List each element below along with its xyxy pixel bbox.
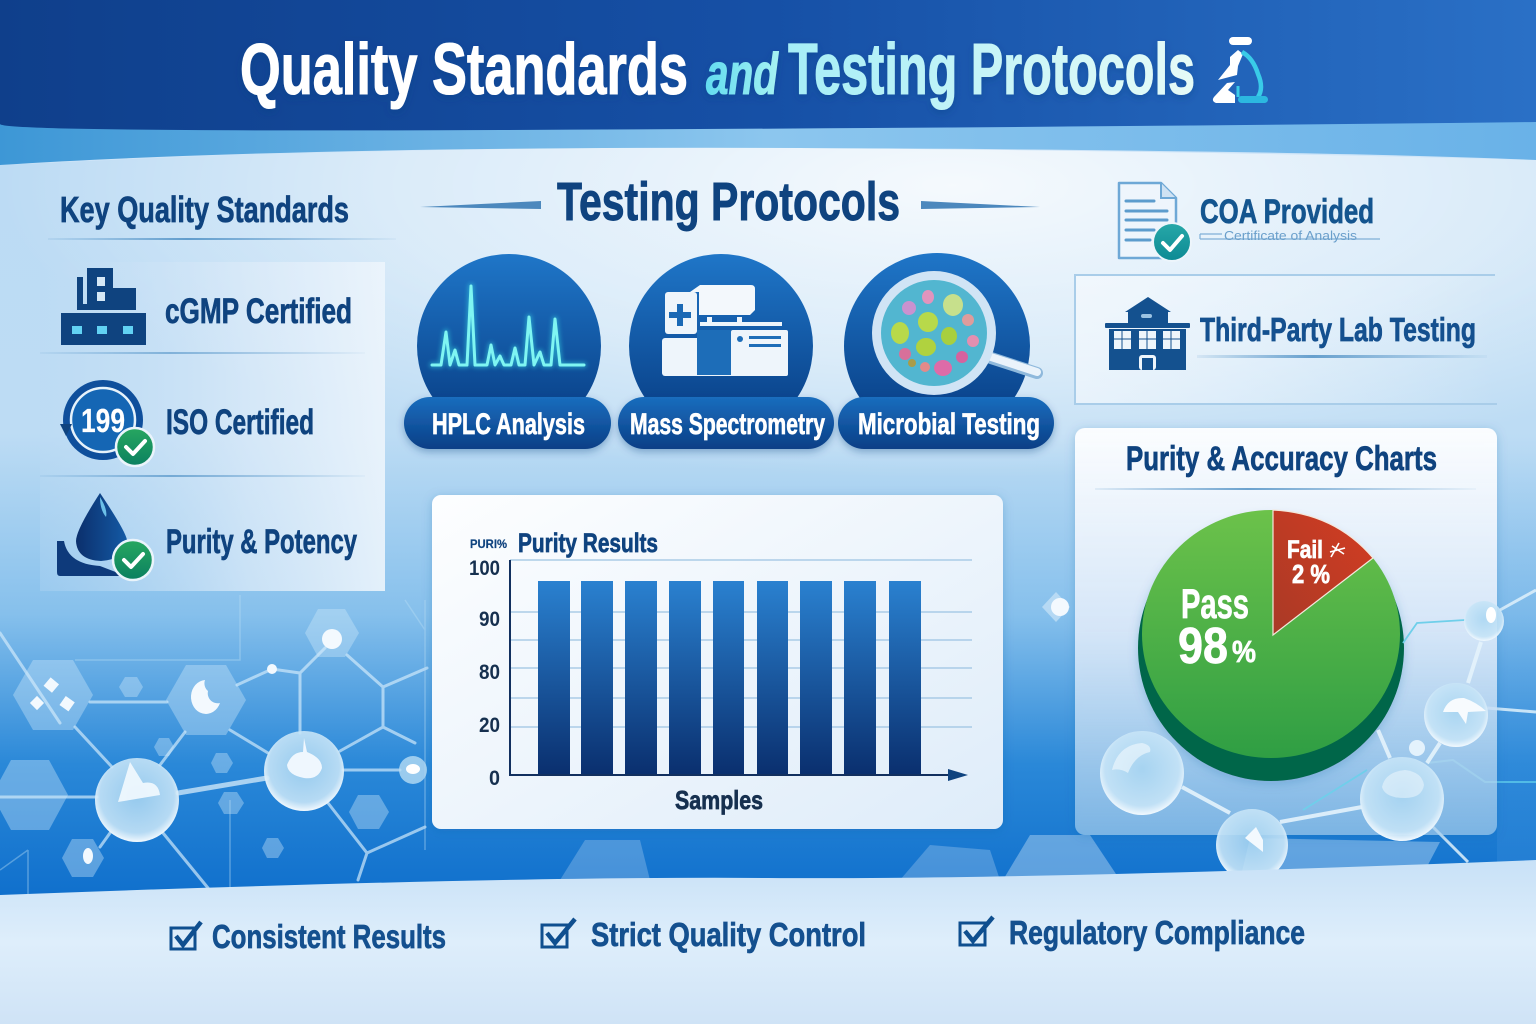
panel: key quality standards [40, 262, 385, 591]
x axis label: Samples [675, 785, 763, 815]
label: purity and potency: Purity & Potency [166, 523, 357, 561]
panel: third-party lab testing [1075, 275, 1497, 404]
icon: chromatogram [417, 254, 601, 438]
pie label: pass: % [1232, 634, 1256, 669]
protocol: mass spectrometry [618, 254, 834, 449]
label pill: Microbial Testing [858, 408, 1040, 441]
footer band [0, 860, 1536, 1024]
chart title [470, 528, 658, 558]
icon: document with check [1119, 183, 1191, 261]
pie label: pass: 98 [1178, 617, 1228, 674]
footer item: strict quality control: Strict Quality Control [591, 916, 866, 953]
icon: factory [61, 268, 146, 345]
y axis labels: 90 [479, 608, 500, 631]
icon: magnifier with microbes [844, 253, 1037, 439]
axes [510, 560, 968, 781]
pie label: fail: Fail [1287, 536, 1323, 564]
protocol: HPLC analysis [404, 254, 611, 449]
label pill: HPLC Analysis [432, 408, 585, 441]
icon: lab building [1105, 297, 1190, 370]
title [240, 30, 1195, 110]
pie label: pass [1178, 580, 1256, 674]
title: Quality Standards [240, 30, 688, 110]
protocol: microbial testing [838, 253, 1054, 449]
panel: purity results bar chart [432, 495, 1003, 829]
bars [538, 581, 921, 775]
footer item: consistent results [171, 918, 446, 955]
chart title: Purity Results [518, 528, 658, 558]
section heading: testing protocols: Testing Protocols [557, 172, 900, 232]
background molecule network right [560, 590, 1536, 880]
label: ISO certified: ISO Certified [166, 403, 314, 442]
panel: purity and accuracy charts [1075, 428, 1497, 835]
label pill: Mass Spectrometry [630, 408, 825, 441]
title: Testing Protocols [788, 30, 1195, 110]
pie label: fail [1287, 536, 1345, 589]
pie label: pass: Pass [1181, 580, 1249, 627]
icon: ISO badge: 199 [81, 402, 125, 439]
icon: purity drop [57, 493, 153, 580]
icon: spectrometer [629, 254, 813, 438]
pie chart [1138, 510, 1404, 781]
gridlines [510, 560, 972, 727]
y axis labels [469, 557, 500, 790]
sub label: certificate of analysis [1200, 228, 1380, 243]
molecule spheres right foreground [1051, 598, 1504, 881]
y axis labels: 100 [469, 557, 500, 580]
label pill [404, 397, 611, 449]
pie label: fail: 2 % [1292, 559, 1330, 589]
footer item: regulatory compliance: Regulatory Compliance [1009, 914, 1305, 951]
heading: Purity & Accuracy Charts [1126, 440, 1437, 478]
y axis labels: 80 [479, 661, 500, 684]
title: and [706, 42, 779, 107]
label pill [838, 397, 1054, 449]
y axis labels: 20 [479, 714, 500, 737]
icon: ISO badge [60, 380, 154, 466]
sub label: certificate of analysis: Certificate of Analysis [1224, 228, 1358, 243]
y axis labels: 0 [489, 767, 500, 790]
label: COA provided: COA Provided [1200, 193, 1374, 231]
header band [0, 0, 1536, 165]
label: cGMP certified: cGMP Certified [165, 292, 352, 331]
background molecule network left [0, 595, 427, 895]
icon: flask in title [1213, 37, 1268, 103]
label pill [618, 397, 834, 449]
callout: COA provided [1119, 183, 1380, 261]
chart title: PURI% [470, 537, 507, 551]
footer item: consistent results: Consistent Results [212, 918, 446, 955]
section heading: key quality standards: Key Quality Standards [60, 189, 349, 230]
